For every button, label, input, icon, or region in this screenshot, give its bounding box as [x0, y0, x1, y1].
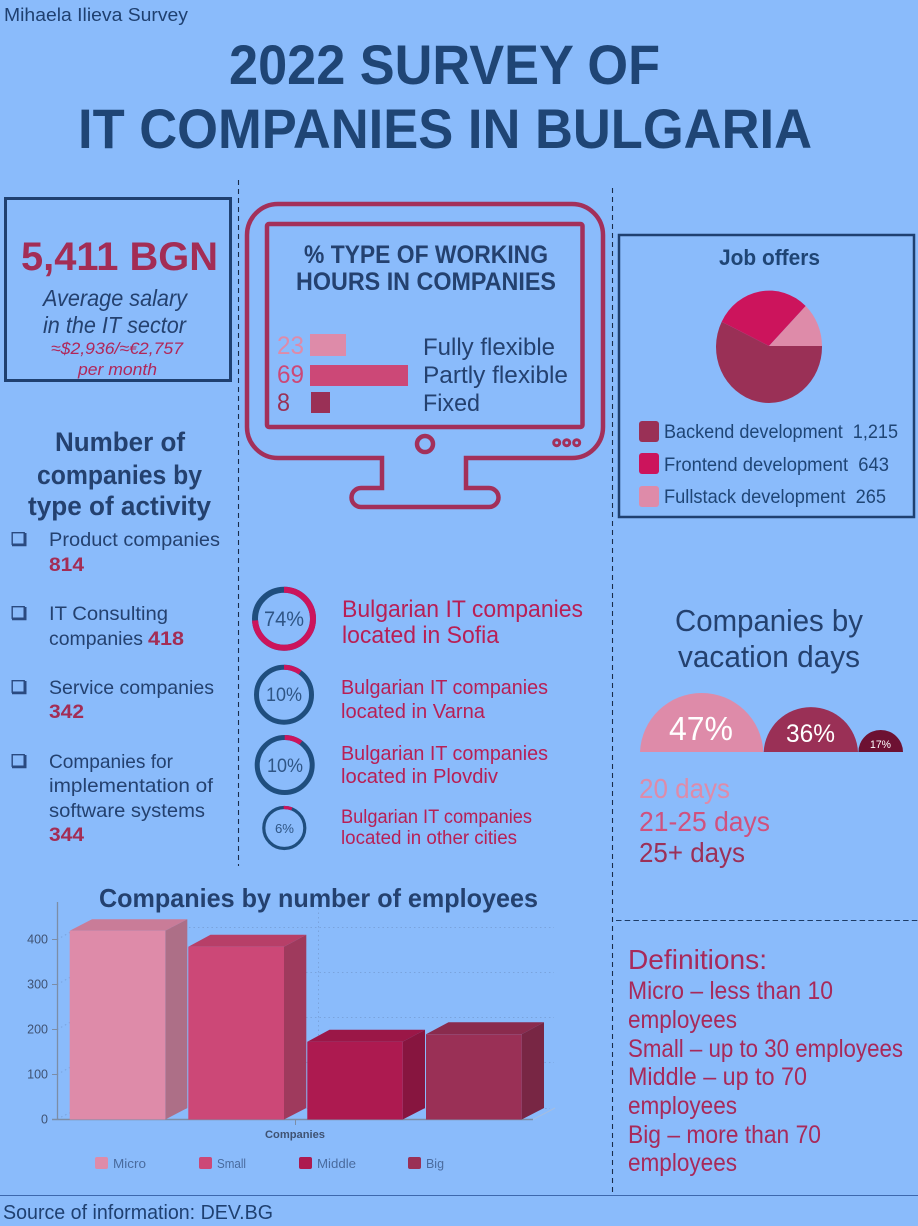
- semicircle chart: vacation days: 36%: [786, 720, 835, 748]
- list item: implementation companies: [12, 751, 214, 846]
- panel: average salary: per month: [77, 360, 157, 379]
- axis labels: 300: [27, 978, 48, 992]
- panel: definitions: employees: [628, 1092, 737, 1120]
- heading: companies by type of activity: companies by: [37, 460, 202, 490]
- ring: Varna 10%: 10%: [266, 685, 302, 706]
- heading: vacation days: Companies by: [675, 603, 863, 638]
- bar chart: working hours: 69: [277, 361, 304, 389]
- bar: big: [426, 1022, 544, 1120]
- panel: working hours monitor: [247, 204, 603, 507]
- bar: small: [188, 935, 306, 1120]
- heading: companies by type of activity: type of activity: [28, 491, 211, 521]
- legend: vacation days: [639, 773, 770, 868]
- title: [78, 33, 812, 160]
- pie chart: job offers: [716, 291, 822, 403]
- title: IT COMPANIES IN BULGARIA: [78, 97, 812, 160]
- bar: micro: [70, 919, 187, 1120]
- list item: IT consulting companies: companies: [49, 628, 143, 650]
- text: other cities: Bulgarian IT companies: [341, 807, 532, 828]
- pie legend: [639, 421, 898, 508]
- list item: service companies: [12, 677, 214, 723]
- text: Sofia: located in Sofia: [342, 622, 500, 649]
- axis labels: 100: [27, 1068, 48, 1082]
- list item: implementation companies: 344: [49, 824, 84, 846]
- text: Varna: located in Varna: [341, 700, 486, 723]
- heading: companies by type of activity: Number of: [55, 427, 186, 457]
- pie legend: Backend development 1,215: [664, 421, 898, 443]
- panel: average salary: Average salary: [41, 285, 188, 311]
- x axis label: Companies: [265, 1129, 325, 1141]
- axis labels: 0: [41, 1112, 48, 1126]
- heading: type of working hours: HOURS IN COMPANIES: [296, 268, 556, 296]
- list item: implementation companies: software systems: [49, 800, 205, 822]
- panel: average salary: [6, 198, 230, 380]
- chart legend: Big: [426, 1156, 444, 1171]
- text: Plovdiv: [341, 742, 548, 788]
- panel: definitions: Middle – up to 70: [628, 1063, 807, 1091]
- heading: vacation days: vacation days: [678, 639, 860, 674]
- panel: definitions: [628, 944, 903, 1177]
- list: companies by activity: [12, 529, 220, 846]
- bar chart: working hours: Partly flexible: [423, 362, 568, 389]
- text: Sofia: [342, 596, 583, 649]
- heading: type of working hours: % TYPE OF WORKING: [304, 241, 548, 269]
- list item: IT consulting companies: IT Consulting: [49, 603, 168, 625]
- pie legend: Fullstack development 265: [664, 486, 886, 508]
- list item: IT consulting companies: 418: [148, 628, 184, 650]
- ring: other cities 6%: [264, 808, 305, 848]
- bar chart: working hours: Fully flexible: [423, 334, 555, 361]
- panel: average salary: 5,411 BGN: [21, 235, 218, 279]
- panel: company locations: [255, 590, 583, 849]
- heading: number of employees: Companies by number of employees: [99, 883, 538, 913]
- panel: definitions: Big – more than 70: [628, 1121, 821, 1149]
- list item: service companies: Service companies: [49, 677, 214, 699]
- semicircle chart: vacation days: 47%: [669, 710, 733, 747]
- text: Plovdiv: Bulgarian IT companies: [341, 742, 548, 765]
- panel: definitions: Definitions:: [628, 944, 767, 975]
- ring: Plovdiv 10%: 10%: [267, 756, 303, 777]
- bar chart: working hours: [277, 332, 568, 417]
- pie legend: Frontend development 643: [664, 454, 889, 476]
- axis labels: 400: [27, 932, 48, 946]
- text: Sofia: Bulgarian IT companies: [342, 596, 583, 623]
- ring: other cities 6%: 6%: [275, 821, 294, 836]
- icon: monitor outline: [247, 204, 603, 507]
- chart legend: Middle: [317, 1156, 356, 1171]
- list item: IT consulting companies: [12, 603, 184, 650]
- panel: job offers: [619, 235, 914, 517]
- ring: Sofia 74%: 74%: [264, 608, 304, 631]
- panel: vacation days: [639, 603, 903, 868]
- heading: companies by type of activity: [28, 427, 211, 521]
- panel: definitions: employees: [628, 1006, 737, 1034]
- panel: companies by number of employees: [27, 883, 555, 1171]
- list item: implementation companies: implementation of: [49, 775, 214, 797]
- ring: Plovdiv 10%: [257, 738, 312, 792]
- legend: vacation days: 21-25 days: [639, 806, 770, 837]
- text: other cities: located in other cities: [341, 828, 517, 849]
- list item: product companies: Product companies: [49, 529, 220, 551]
- axis labels: [27, 932, 48, 1126]
- panel: average salary: in the IT sector: [43, 312, 187, 338]
- text: other cities: [341, 807, 532, 849]
- list item: product companies: [12, 529, 220, 576]
- chart legend: Small: [217, 1156, 246, 1171]
- legend: vacation days: 20 days: [639, 773, 730, 804]
- list item: product companies: 814: [49, 554, 84, 576]
- chart: 3D bar chart: [27, 902, 555, 1171]
- text: Plovdiv: located in Plovdiv: [341, 765, 499, 788]
- survey author label: Mihaela Ilieva Survey: [4, 4, 189, 25]
- list item: service companies: 342: [49, 701, 84, 723]
- panel: definitions: employees: [628, 1149, 737, 1177]
- ring: Varna 10%: [256, 667, 312, 722]
- semicircle chart: vacation days: 17%: [870, 739, 891, 751]
- bar chart: working hours: Fixed: [423, 390, 480, 417]
- heading: vacation days: [675, 603, 863, 674]
- chart legend: Micro: [113, 1156, 146, 1171]
- bar chart: working hours: 23: [277, 332, 304, 360]
- ring: Sofia 74%: [255, 590, 313, 648]
- text: Varna: Bulgarian IT companies: [341, 676, 548, 699]
- list item: implementation companies: Companies for: [49, 751, 173, 773]
- bar chart: working hours: 8: [277, 389, 290, 417]
- source note: Source of information: DEV.BG: [3, 1202, 273, 1224]
- legend: vacation days: 25+ days: [639, 837, 745, 868]
- heading: type of working hours: [296, 241, 556, 296]
- heading: job offers: Job offers: [719, 245, 820, 270]
- semicircle chart: vacation days: [640, 693, 903, 752]
- title: 2022 SURVEY OF: [229, 33, 660, 96]
- chart legend: [95, 1156, 444, 1171]
- panel: definitions: Micro – less than 10: [628, 977, 833, 1005]
- text: Varna: [341, 676, 548, 723]
- axis labels: 200: [27, 1022, 48, 1036]
- bar: middle: [307, 1030, 425, 1120]
- panel: average salary: ≈$2,936/≈€2,757: [51, 339, 184, 358]
